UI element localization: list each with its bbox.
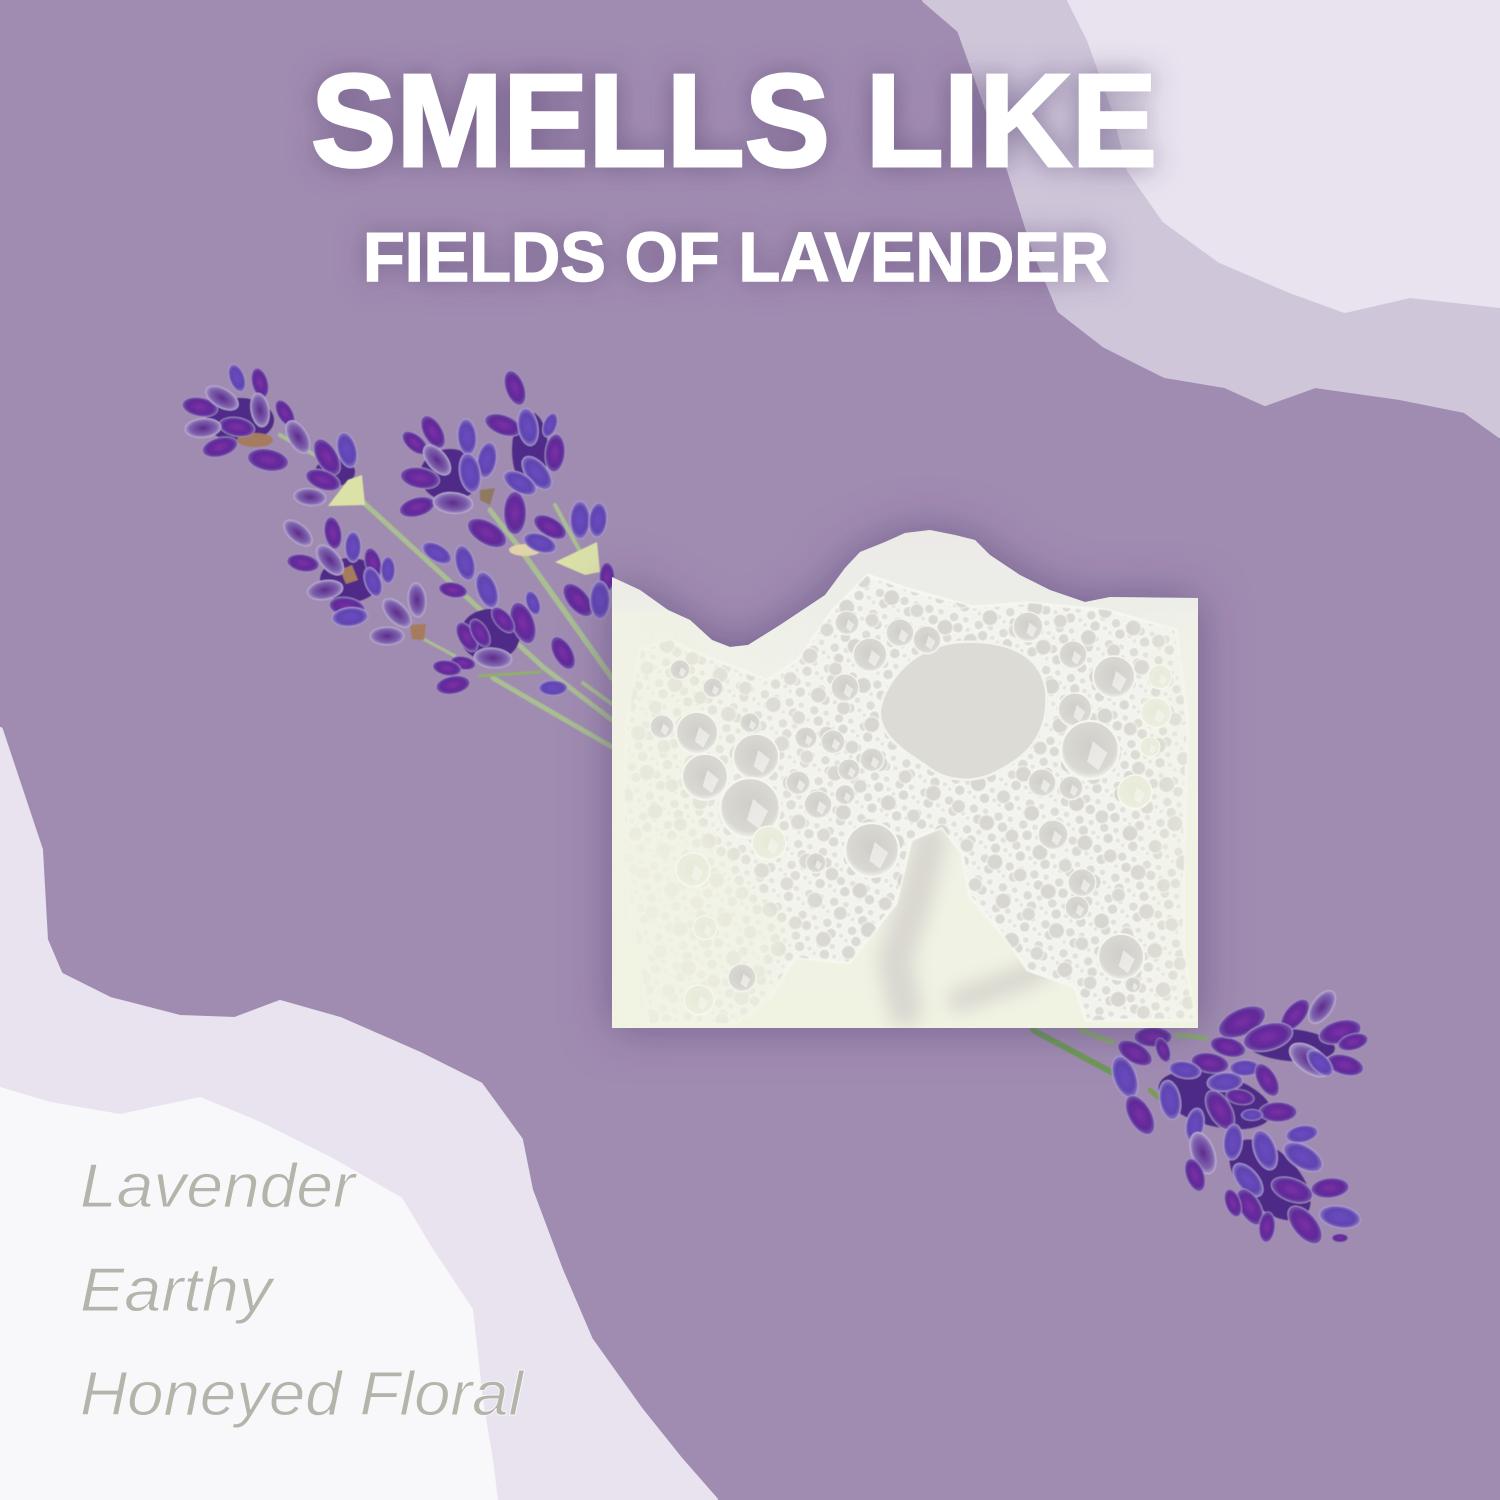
pale wash over foam edges (623, 610, 1192, 1022)
central pool (880, 642, 1047, 780)
sprig head (1107, 986, 1370, 1250)
torn paper: top right (925, 0, 1500, 435)
grey patches (895, 840, 1060, 1010)
stems (280, 435, 612, 747)
lavender sprigs left (181, 362, 615, 747)
head core (1152, 1025, 1336, 1235)
note: earthy: Earthy (80, 1256, 276, 1325)
soap surface foam (626, 574, 1194, 1028)
large bubbles (650, 611, 1172, 1015)
foam field (623, 575, 1195, 1023)
sprig heads (181, 362, 615, 697)
soap body with shadow (612, 530, 1198, 1028)
scent notes list (80, 1152, 525, 1429)
title: SMELLS LIKE (311, 47, 1157, 194)
note: lavender: Lavender (80, 1152, 357, 1221)
lavender sprig right (1033, 986, 1370, 1250)
stems (1033, 1030, 1205, 1103)
lower left pale wash (710, 870, 782, 1014)
note: honeyed floral: Honeyed Floral (80, 1360, 525, 1429)
subtitle: FIELDS OF LAVENDER (363, 218, 1109, 296)
soap bar (590, 530, 1220, 1040)
torn paper: bottom left (0, 730, 715, 1500)
head cores (206, 398, 548, 661)
calyx bases (237, 433, 600, 640)
